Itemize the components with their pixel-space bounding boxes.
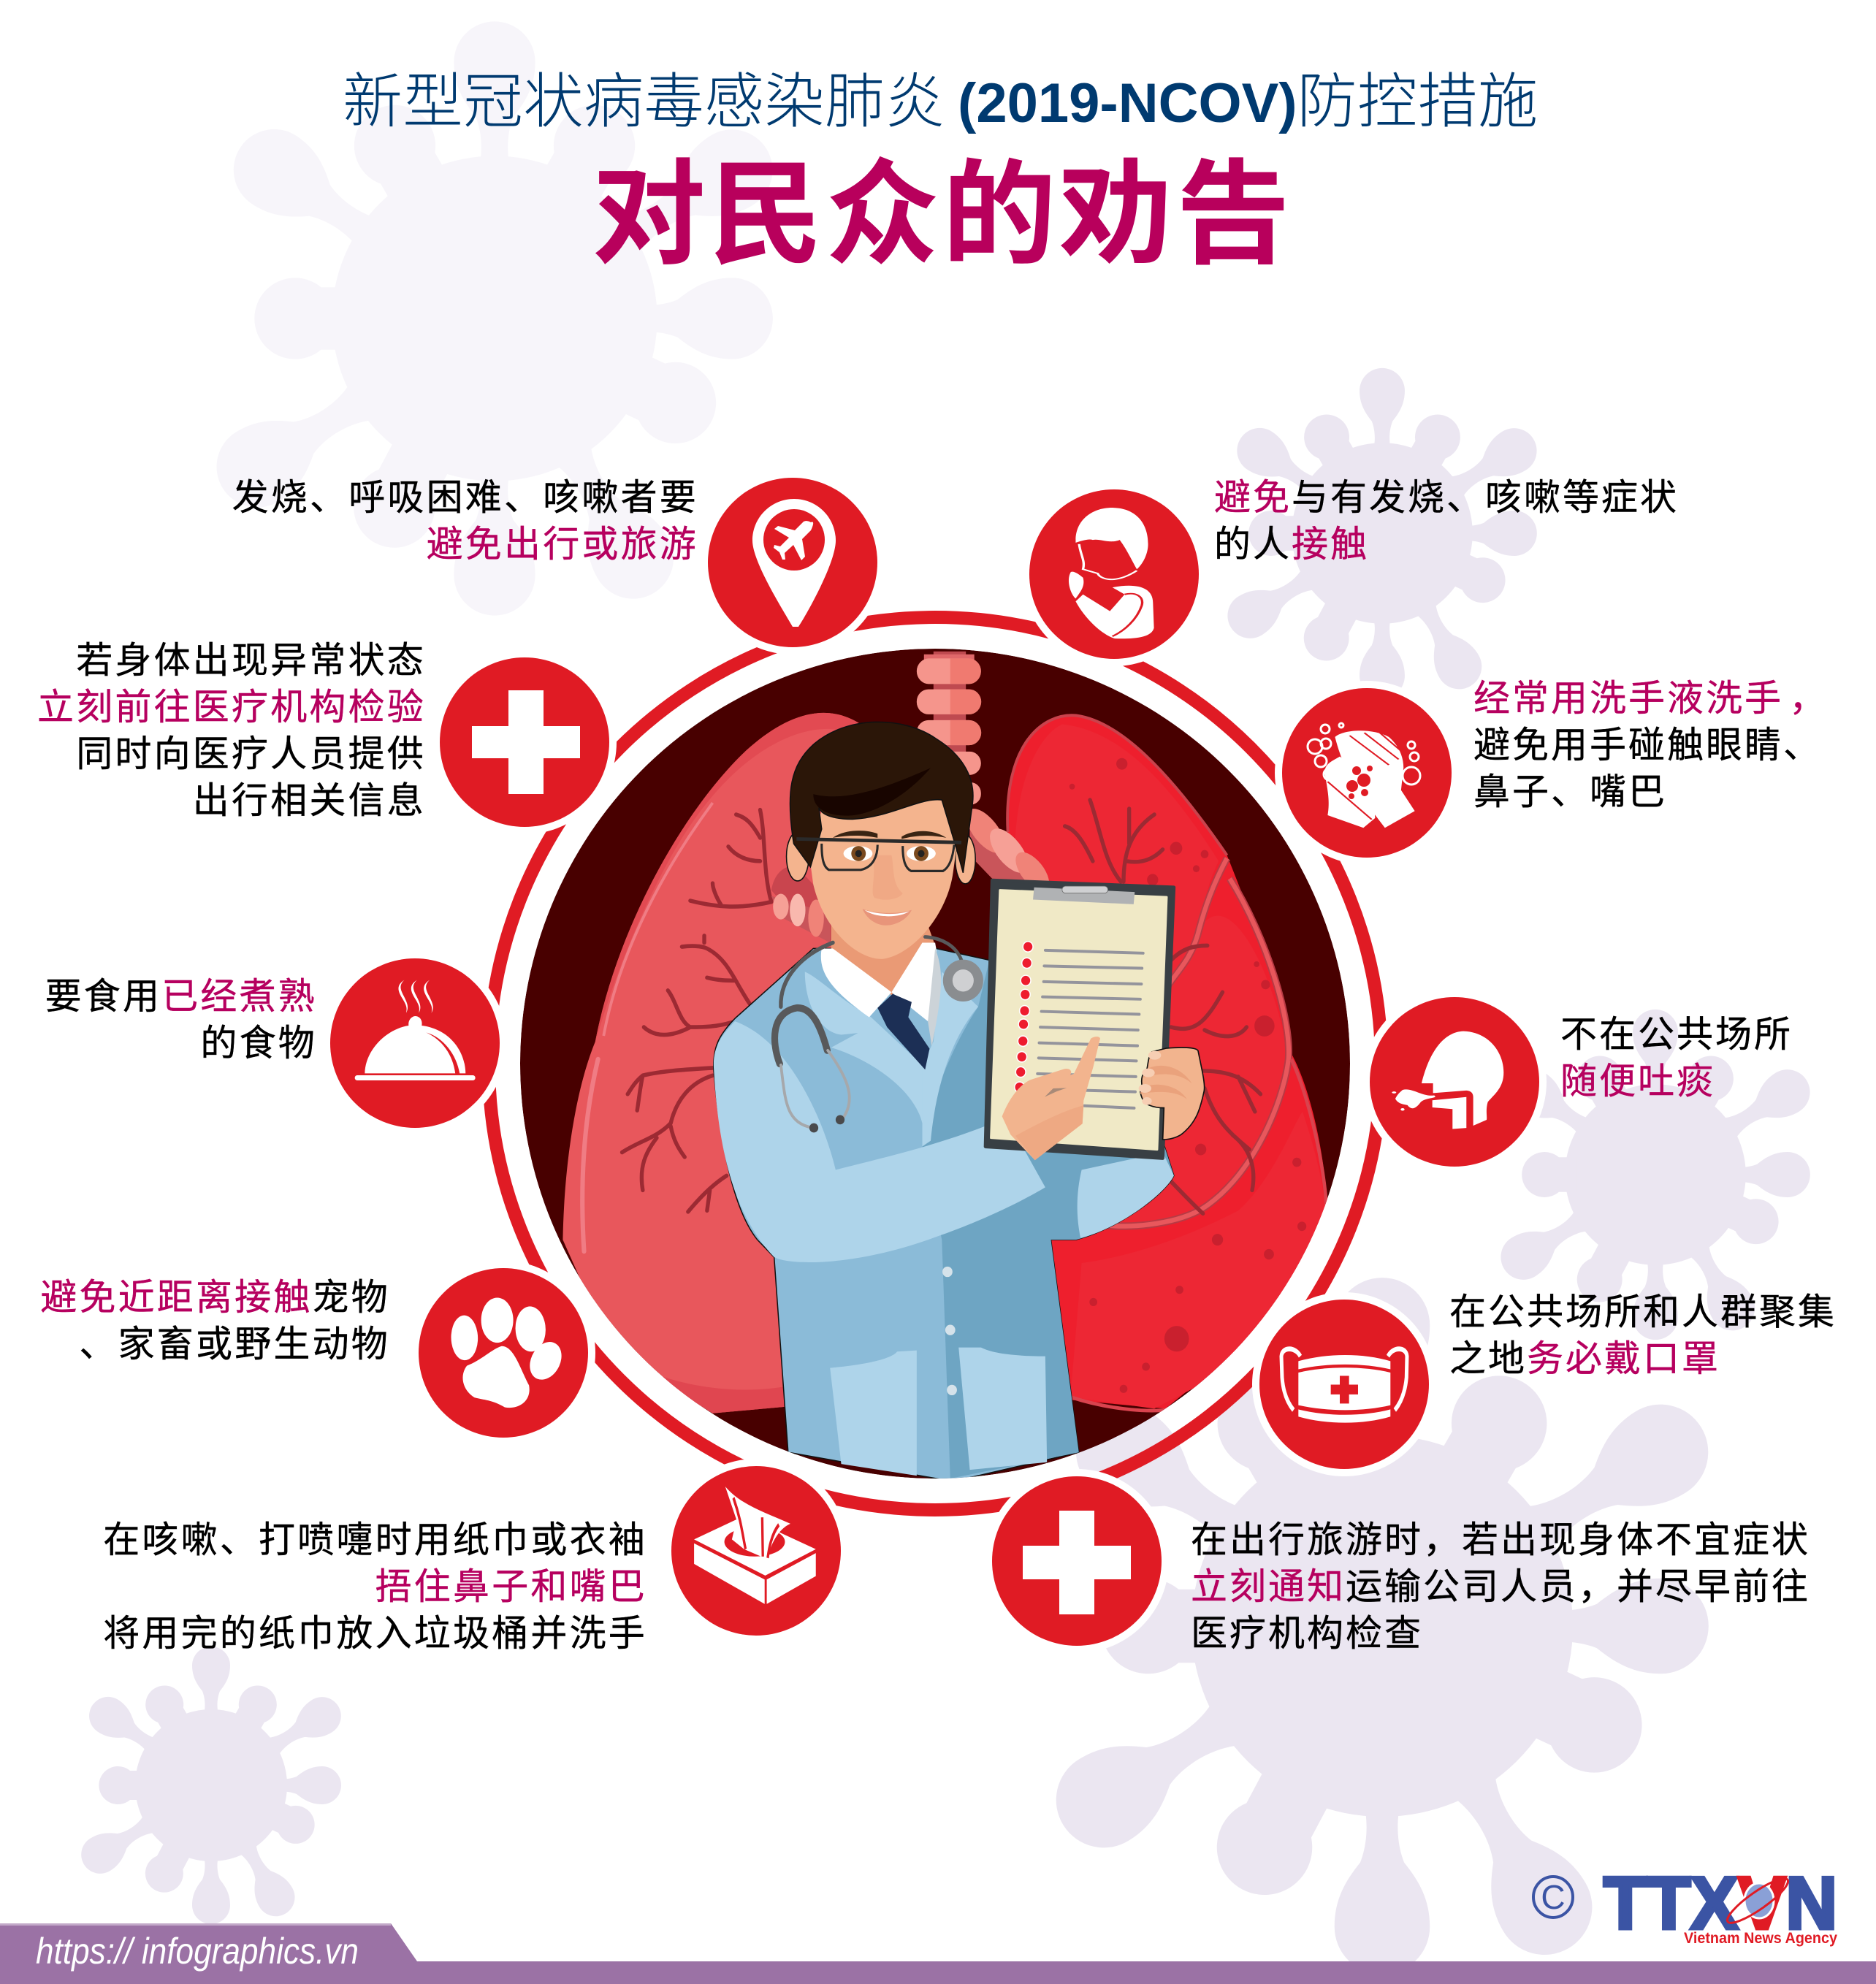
- doctor: [714, 722, 1174, 1481]
- holding hand: [1140, 1048, 1205, 1140]
- icon: medical cross bottom: [985, 1469, 1169, 1653]
- right lung spots: [1069, 758, 1306, 1393]
- eyes: [844, 846, 872, 861]
- text: seek care: 立刻前往医疗机构检验: [37, 687, 426, 728]
- virus: bottom left: [74, 1647, 348, 1924]
- text: avoid contact: [1214, 477, 1679, 565]
- dark circle background: [520, 649, 1350, 1479]
- hair: [790, 722, 973, 873]
- virus: top left pale: [201, 21, 788, 616]
- right lung veins: [1065, 800, 1261, 1213]
- virus: right: [1492, 1010, 1818, 1340]
- title line 2: 对民众的劝告: [592, 152, 1293, 279]
- logo: copyright mark: C: [1541, 1878, 1566, 1916]
- text: notify staff: 立刻通知运输公司人员，并尽早前往: [1191, 1566, 1810, 1607]
- logo: copyright mark: [1533, 1877, 1573, 1918]
- clipboard: [985, 880, 1174, 1159]
- icon: spitting head: [1362, 990, 1547, 1174]
- coat body: [714, 948, 1174, 1481]
- text: cooked food: [45, 976, 317, 1064]
- icon: paw: [411, 1261, 595, 1445]
- text: avoid travel: 避免出行或旅游: [427, 524, 698, 565]
- text: no spitting: [1560, 1014, 1793, 1102]
- text: no spitting: 随便吐痰: [1560, 1061, 1715, 1102]
- text: wash hands: 经常用洗手液洗手，: [1473, 678, 1828, 719]
- text: no spitting: 不在公共场所: [1560, 1014, 1793, 1055]
- text: cover mouth: 将用完的纸巾放入垃圾桶并洗手: [103, 1613, 647, 1654]
- checklist dots: [1015, 942, 1033, 1092]
- text: wear mask: 之地务必戴口罩: [1449, 1338, 1720, 1379]
- text: seek care: 同时向医疗人员提供: [76, 733, 426, 774]
- text: seek care: 出行相关信息: [193, 780, 426, 821]
- icon: plane location pin: [701, 470, 885, 655]
- text: wash hands: 避免用手碰触眼睛、: [1473, 725, 1822, 766]
- hands: [1002, 1037, 1205, 1160]
- text: notify staff: 医疗机构检查: [1191, 1613, 1423, 1654]
- face: [808, 799, 958, 959]
- right lung: [1003, 715, 1327, 1408]
- shirt collar: [821, 942, 937, 1021]
- text: seek care: 若身体出现异常状态: [76, 640, 426, 681]
- logo: TTXVN: TTXVN: [1604, 1863, 1837, 1945]
- text: cooked food: 要食用已经煮熟: [45, 976, 317, 1017]
- pockets: [830, 1351, 917, 1476]
- pointing hand: [1002, 1037, 1100, 1160]
- text: avoid contact: 的人接触: [1214, 524, 1369, 565]
- buttons: [942, 1267, 953, 1277]
- text: animals: 避免近距离接触宠物: [40, 1277, 390, 1318]
- text: seek care: [37, 640, 426, 821]
- text: cooked food: 的食物: [200, 1023, 317, 1064]
- text: wash hands: 鼻子、嘴巴: [1473, 771, 1667, 812]
- icon: washing hands: [1275, 681, 1459, 865]
- text: animals: [40, 1277, 390, 1365]
- footer url: https:// infographics.vn: [36, 1931, 359, 1972]
- tie: [877, 994, 929, 1069]
- left sleeve: [714, 1021, 1045, 1262]
- text: wash hands: [1473, 678, 1828, 812]
- icon: covered dish: [323, 951, 507, 1135]
- lapels: [805, 972, 922, 1123]
- glasses: [796, 839, 961, 871]
- text: wear mask: [1449, 1291, 1837, 1379]
- icon: coughing person: [1022, 482, 1206, 666]
- mouth: [863, 909, 912, 926]
- stethoscope: [774, 936, 961, 1128]
- icon: tissue box: [664, 1459, 848, 1643]
- eyebrows: [833, 831, 877, 838]
- trachea: [916, 652, 982, 805]
- left lung veins: [622, 810, 771, 1212]
- red ring: [489, 617, 1381, 1510]
- virus: bottom right large: [1038, 1278, 1726, 1975]
- text: wear mask: 在公共场所和人群聚集: [1449, 1291, 1837, 1332]
- checklist lines: [1037, 950, 1143, 1108]
- text: cover mouth: [103, 1519, 647, 1654]
- title line 1: 新型冠状病毒感染肺炎(2019-NCOV)防控措施: [343, 69, 1538, 135]
- text: cover mouth: 捂住鼻子和嘴巴: [375, 1566, 647, 1607]
- text: cover mouth: 在咳嗽、打喷嚏时用纸巾或衣袖: [103, 1519, 647, 1560]
- virus: top right: [1219, 368, 1545, 698]
- footer tab highlight: [0, 1923, 391, 1926]
- text: animals: 、家畜或野生动物: [79, 1324, 390, 1365]
- text: notify staff: 在出行旅游时，若出现身体不宜症状: [1191, 1519, 1810, 1560]
- icon: face mask: [1252, 1292, 1436, 1476]
- left bronchus: [771, 866, 836, 942]
- text: avoid travel: 发烧、呼吸困难、咳嗽者要: [232, 477, 698, 518]
- right lung lobe bands: [1070, 858, 1327, 1411]
- left lung: [563, 713, 861, 1413]
- logo: TTXVN: Vietnam News Agency: [1684, 1930, 1837, 1947]
- icon: medical cross left: [432, 650, 617, 834]
- text: notify staff: [1191, 1519, 1810, 1654]
- neck: [831, 925, 937, 995]
- right bronchus: [969, 809, 1049, 881]
- text: avoid travel: [232, 477, 698, 565]
- right sleeve: [1078, 1153, 1174, 1238]
- central illustration: doctor and lungs: [520, 649, 1350, 1481]
- footer bar: [0, 1923, 1876, 1984]
- ears: [787, 832, 809, 881]
- text: avoid contact: 避免与有发烧、咳嗽等症状: [1214, 477, 1679, 518]
